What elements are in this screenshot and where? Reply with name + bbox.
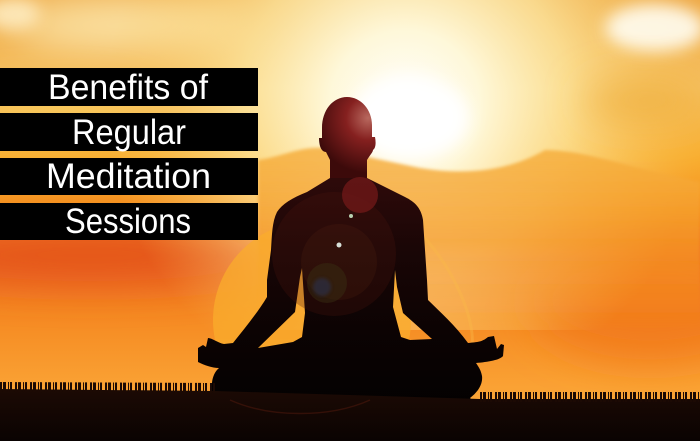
title line 4: Sessions	[65, 202, 191, 241]
title line 3	[0, 157, 258, 196]
distant mountains	[258, 148, 700, 330]
lens flare halo	[213, 221, 472, 419]
flare circles on body	[272, 192, 396, 316]
title line 4	[0, 202, 258, 241]
title line 1: Benefits of	[48, 68, 208, 107]
title line 2: Regular	[72, 113, 186, 152]
meditating figure silhouette	[198, 97, 504, 410]
head	[319, 97, 376, 185]
grass ground	[0, 387, 700, 441]
title line 3: Meditation	[46, 157, 211, 196]
torso, arms and crossed legs	[198, 178, 504, 410]
title block	[0, 68, 258, 241]
title line 1	[0, 68, 258, 107]
title line 2	[0, 113, 258, 152]
